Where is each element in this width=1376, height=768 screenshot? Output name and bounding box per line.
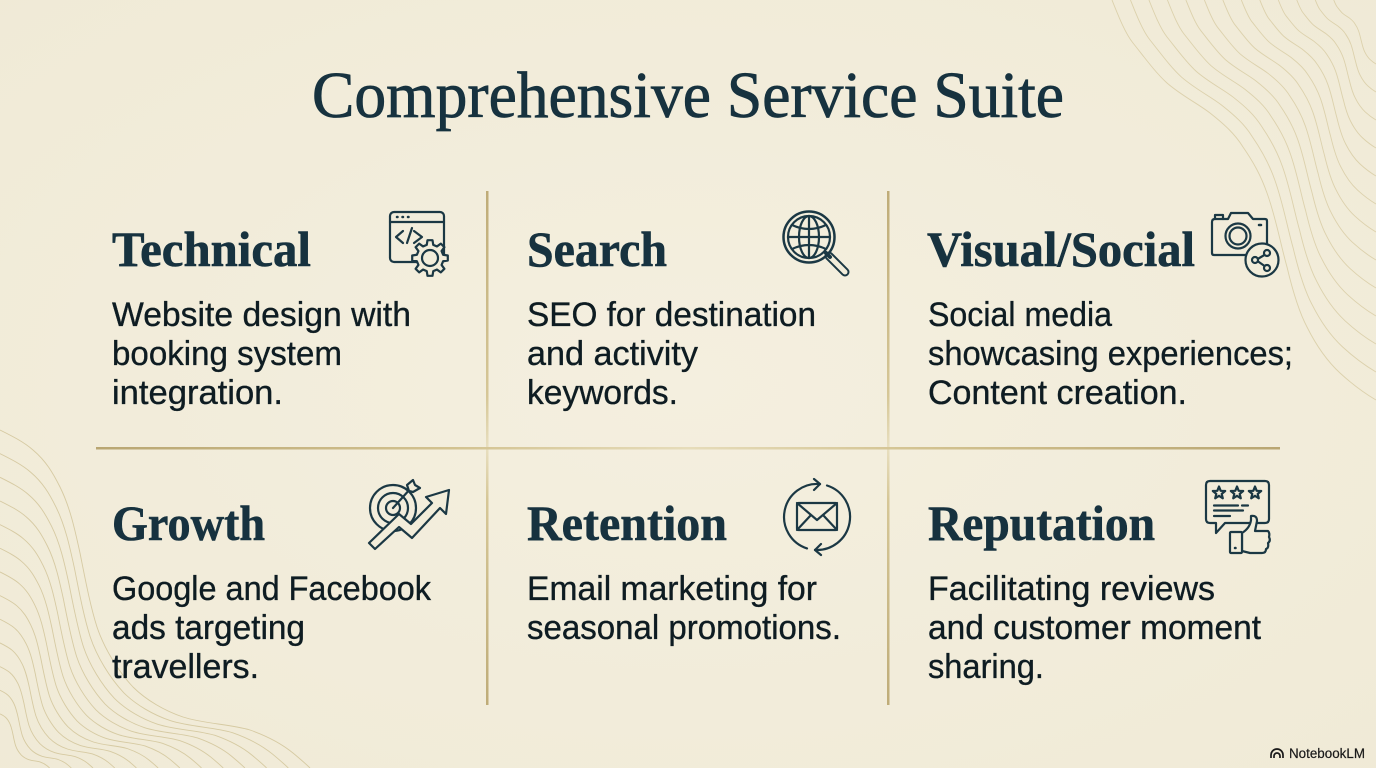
icon: browser window with gear <box>390 212 448 276</box>
contour pattern: top right <box>1112 0 1376 400</box>
panel: visual/social <box>927 213 1293 412</box>
description: technical <box>112 296 411 412</box>
description: visual/social: Social media <box>928 296 1112 334</box>
description: retention: seasonal promotions. <box>527 609 841 647</box>
description: visual/social: Content creation. <box>928 374 1187 412</box>
icon: target and rising arrow <box>369 480 449 549</box>
heading: growth: Growth <box>112 495 265 551</box>
description: search: and activity <box>527 335 698 373</box>
grid dividers <box>96 191 1280 705</box>
description: reputation <box>928 570 1262 686</box>
title: Comprehensive Service Suite <box>312 59 1064 132</box>
description: growth: travellers. <box>112 648 259 686</box>
panel: technical <box>112 212 448 412</box>
heading: reputation: Reputation <box>928 495 1155 551</box>
description: reputation: Facilitating reviews <box>928 570 1215 608</box>
heading: retention: Retention <box>527 495 727 551</box>
icon: globe under magnifier <box>784 212 845 272</box>
panel: retention <box>527 479 850 647</box>
icon: NotebookLM logo <box>1271 749 1283 758</box>
description: visual/social: showcasing experiences; <box>928 335 1293 373</box>
heading: visual/social: Visual/Social <box>927 221 1195 277</box>
description: retention: Email marketing for <box>527 570 817 608</box>
description: reputation: and customer moment <box>928 609 1262 647</box>
panel: growth <box>112 480 449 686</box>
description: growth <box>112 570 432 686</box>
description: growth: Google and Facebook <box>112 570 432 608</box>
description: search: keywords. <box>527 374 678 412</box>
description: technical: Website design with <box>112 296 411 334</box>
description: visual/social <box>928 296 1293 412</box>
icon: camera with share badge <box>1212 213 1278 276</box>
heading: technical: Technical <box>112 221 311 277</box>
description: search: SEO for destination <box>527 296 816 334</box>
description: technical: booking system <box>112 335 342 373</box>
description: reputation: sharing. <box>928 648 1044 686</box>
description: retention <box>527 570 841 647</box>
description: technical: integration. <box>112 374 283 412</box>
panel: reputation <box>928 481 1270 686</box>
heading: search: Search <box>527 221 667 277</box>
description: search <box>527 296 816 412</box>
description: growth: ads targeting <box>112 609 305 647</box>
icon: envelope with cycle arrows <box>784 479 850 555</box>
icon: review bubble with thumbs up <box>1206 481 1270 553</box>
watermark: NotebookLM: NotebookLM <box>1289 746 1365 761</box>
panel: search <box>527 212 845 412</box>
contour pattern: bottom left <box>0 430 310 768</box>
